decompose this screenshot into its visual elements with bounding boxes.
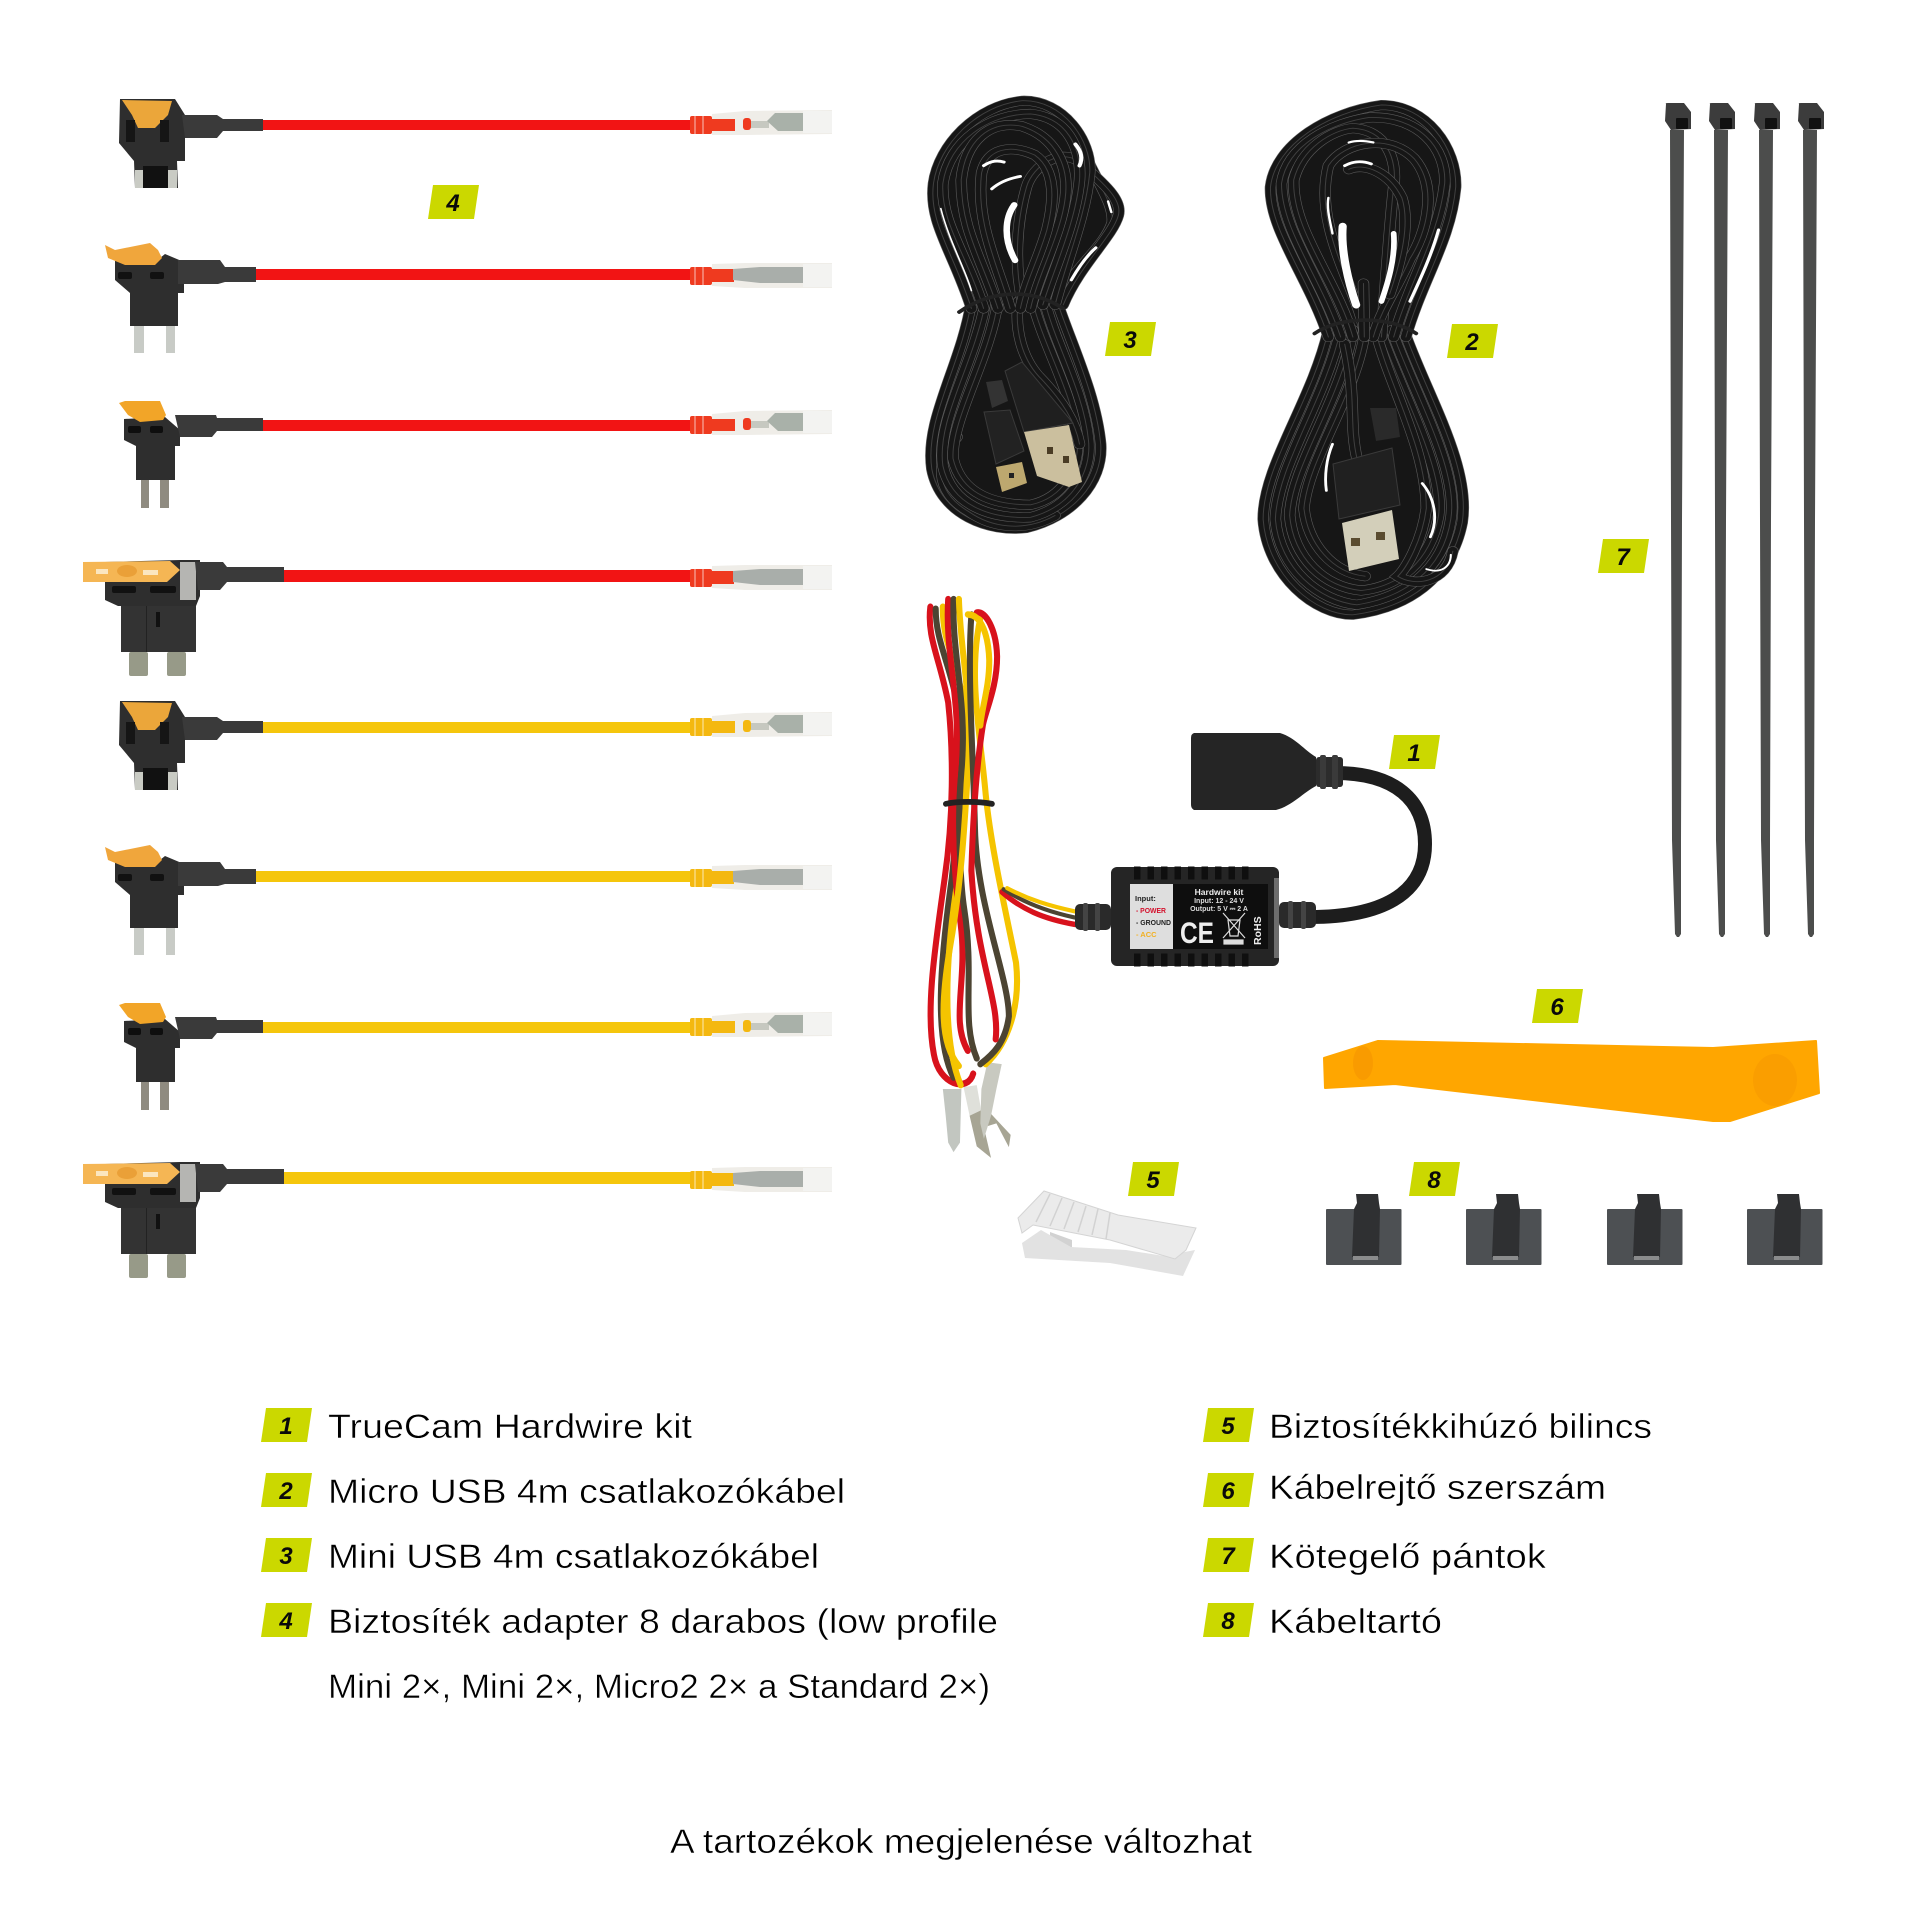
terminals	[943, 1062, 1011, 1158]
legend item 3: Mini USB 4m csatlakozókábel	[328, 1538, 819, 1576]
icon: orange trim tool	[1324, 1041, 1819, 1121]
badge 8	[1409, 1162, 1460, 1196]
badge 3	[1105, 322, 1156, 356]
label texts: Input: 12 - 24 V	[1194, 898, 1244, 905]
legend item 8: 8	[1221, 1608, 1235, 1635]
fuse adapter yellow 1	[119, 701, 832, 790]
badge 4	[428, 185, 479, 219]
legend item 4: 4	[278, 1608, 293, 1635]
badge 3: 3	[1123, 327, 1137, 354]
socket strain relief	[1316, 755, 1343, 789]
label white	[1130, 884, 1173, 949]
legend item 4: Biztosíték adapter 8 darabos (low profile	[328, 1603, 998, 1641]
badge 1: 1	[1407, 740, 1421, 767]
label texts: RoHS	[1252, 916, 1264, 945]
cable to USB socket	[1310, 773, 1425, 917]
label texts	[1135, 887, 1264, 950]
badge 7: 7	[1616, 544, 1631, 571]
module body	[1111, 867, 1279, 966]
icon: wire bundle	[930, 599, 1075, 1158]
badge 7	[1598, 539, 1649, 573]
legend item 1: 1	[279, 1413, 293, 1440]
fuse adapter red 2	[105, 243, 832, 353]
icon: hardwire module	[1075, 733, 1425, 966]
icon: white fuse puller	[1018, 1191, 1196, 1276]
legend item 6: 6	[1221, 1478, 1235, 1505]
legend item 5: 5	[1221, 1413, 1235, 1440]
badge 5: 5	[1146, 1167, 1160, 1194]
icon: micro USB cable coil	[1263, 105, 1463, 615]
legend left column	[261, 1408, 998, 1706]
legend item 2: Micro USB 4m csatlakozókábel	[328, 1473, 845, 1511]
fuse adapter red 3	[119, 401, 832, 508]
legend right column	[1203, 1408, 1652, 1641]
icon: cable ties	[1665, 103, 1824, 937]
badge 2: 2	[1464, 329, 1479, 356]
legend item 2: 2	[278, 1478, 293, 1505]
legend item 5: Biztosítékkihúzó bilincs	[1269, 1408, 1652, 1446]
USB socket	[1191, 733, 1316, 810]
label texts: Hardwire kit	[1195, 887, 1243, 897]
badge 4: 4	[445, 190, 460, 217]
footer note: A tartozékok megjelenése változhat	[670, 1823, 1253, 1861]
fuse adapter red 1	[119, 99, 832, 188]
icon: WEEE bin	[1223, 913, 1245, 944]
legend item 4	[261, 1603, 998, 1706]
label texts: - POWER	[1136, 906, 1167, 915]
legend item 8	[1203, 1603, 1442, 1641]
badge 6	[1532, 989, 1583, 1023]
label texts: - GROUND	[1136, 918, 1172, 927]
legend item 7: 7	[1221, 1543, 1236, 1570]
badge 8: 8	[1427, 1167, 1441, 1194]
label texts: CE	[1180, 917, 1214, 950]
label texts: Input:	[1135, 894, 1156, 903]
legend item 8: Kábeltartó	[1269, 1603, 1442, 1641]
legend item 6: Kábelrejtő szerszám	[1269, 1469, 1606, 1507]
fuse adapter yellow 3	[119, 1003, 832, 1110]
panel: fuse adapters, red	[83, 99, 832, 676]
legend item 3: 3	[279, 1543, 293, 1570]
vents	[1134, 873, 1254, 960]
legend item 4: Mini 2×, Mini 2×, Micro2 2× a Standard 2×)	[328, 1668, 990, 1706]
label texts: Output: 5 V ⎓ 2 A	[1190, 906, 1248, 913]
module edge	[1274, 878, 1279, 958]
badge 6: 6	[1550, 994, 1564, 1021]
legend item 1: TrueCam Hardwire kit	[328, 1408, 693, 1446]
strain reliefs	[1075, 901, 1316, 931]
fuse adapter yellow 4	[83, 1162, 832, 1278]
badge 1	[1389, 735, 1440, 769]
label texts: - ACC	[1136, 930, 1157, 939]
legend item 7: Kötegelő pántok	[1269, 1538, 1547, 1576]
label black	[1173, 884, 1268, 949]
icon: mini USB cable coil	[931, 101, 1119, 529]
badge 5	[1128, 1162, 1179, 1196]
icon: cable clips	[1326, 1194, 1822, 1265]
panel: fuse adapters, yellow	[83, 701, 832, 1278]
fuse adapter yellow 2	[105, 845, 832, 955]
badge 2	[1447, 324, 1498, 358]
fuse adapter red 4	[83, 560, 832, 676]
